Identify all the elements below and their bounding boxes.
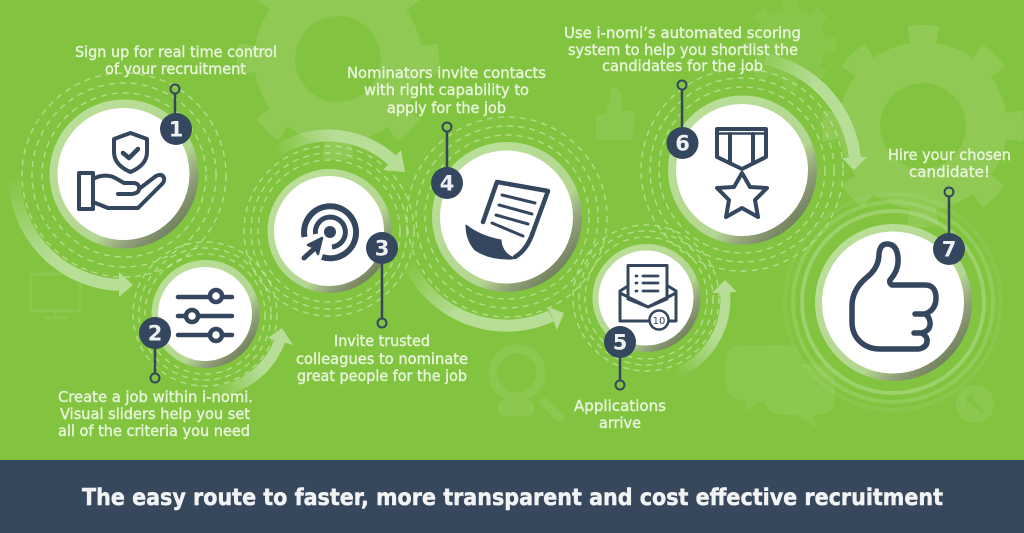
- icon: envelope with letter and count: [620, 266, 676, 330]
- step 5: [574, 244, 700, 432]
- text 4: Nominators invite contacts: [347, 64, 546, 82]
- badge 3: [366, 232, 398, 264]
- arrow: step 2 to 3: [212, 328, 293, 392]
- step 4: [347, 64, 582, 292]
- footer headline: The easy route to faster, more transparent and cost effective recruitment: [82, 485, 943, 511]
- connector 1: [170, 84, 180, 130]
- badge 1: 1: [169, 118, 183, 142]
- badge 2: [139, 317, 171, 349]
- connector 6: [678, 80, 686, 135]
- arrow: step 5 to 6: [677, 280, 737, 373]
- icon: count label: 10: [653, 316, 665, 327]
- badge 7: 7: [942, 238, 956, 262]
- text 3: [296, 332, 468, 385]
- step 6: [564, 24, 817, 244]
- text 3: colleagues to nominate: [296, 350, 468, 368]
- connector 7: [944, 188, 954, 240]
- text 6: candidates for the job: [602, 57, 763, 75]
- step 1: [50, 43, 277, 248]
- text 4: with right capability to: [364, 81, 529, 99]
- text 2: Create a job within i-nomi.: [58, 388, 253, 406]
- watermark: large gear top centre: [248, 0, 428, 149]
- icon: medal with star: [717, 129, 767, 217]
- badge 4: 4: [440, 172, 454, 196]
- icon: target with arrow: [304, 206, 356, 258]
- step 6 circle: [668, 96, 817, 244]
- text 5: arrive: [599, 414, 641, 432]
- text 2: all of the criteria you need: [58, 422, 250, 440]
- text 2: [58, 388, 253, 440]
- text 5: Applications: [574, 397, 666, 415]
- connector 4: [442, 122, 452, 175]
- text 3: great people for the job: [297, 367, 467, 385]
- step 1 circle: [50, 100, 198, 248]
- connector 2: [150, 340, 160, 382]
- badge 2: 2: [148, 322, 162, 346]
- text 5: [574, 397, 666, 432]
- text 4: [347, 64, 546, 117]
- dashed orbit rings: [22, 69, 843, 386]
- footer banner: [0, 460, 1024, 533]
- step 7: [815, 146, 1011, 381]
- badge 6: 6: [675, 132, 690, 156]
- icon: hand holding shield: [79, 133, 164, 209]
- text 6: [564, 24, 801, 75]
- icon: sliders: [178, 290, 232, 341]
- text 1: of your recruitment: [105, 60, 246, 78]
- badge 1: [160, 113, 192, 145]
- watermark: gear top right: [833, 36, 1013, 216]
- watermark: monitor: [31, 274, 80, 318]
- text 7: [888, 146, 1011, 181]
- watermark: cursor badge: [956, 385, 994, 423]
- badge 3: 3: [375, 236, 389, 260]
- step 2: [58, 260, 260, 440]
- badge 6: [666, 127, 698, 159]
- text 2: Visual sliders help you set: [60, 405, 250, 423]
- watermark: chat bubbles: [725, 345, 835, 428]
- text 1: [75, 43, 277, 78]
- arrow: step 4 to 5: [408, 262, 564, 330]
- background watermark icons: [31, 0, 1013, 428]
- watermark: magnifier person: [493, 349, 560, 418]
- arrow: step 1 to 2: [14, 172, 133, 297]
- connector 3: [378, 255, 386, 328]
- text 4: apply for the job: [387, 99, 506, 117]
- solid rings around step 7: [785, 194, 1001, 410]
- step 4 circle: [432, 142, 582, 292]
- badge 5: [604, 326, 636, 358]
- icon: document scroll: [466, 182, 548, 259]
- watermark: small gear behind step 6: [750, 5, 830, 85]
- text 3: Invite trusted: [334, 332, 430, 350]
- badge 5: 5: [613, 330, 627, 354]
- step 2 circle: [152, 260, 260, 368]
- step 7 circle: [815, 224, 972, 381]
- watermark: thumb: [596, 88, 636, 140]
- text 1: Sign up for real time control: [75, 43, 277, 61]
- arrow: step 6 to 7: [765, 59, 867, 170]
- icon: thumbs up: [852, 244, 936, 349]
- step 5 circle: [592, 244, 700, 352]
- text 6: Use i-nomi’s automated scoring: [564, 24, 801, 42]
- arrow: step 3 to 4: [278, 136, 405, 172]
- step 3 circle: [268, 169, 392, 293]
- text 6: system to help you shortlist the: [568, 41, 798, 59]
- step 3: [268, 169, 468, 385]
- badge 7: [933, 233, 965, 265]
- badge 4: [431, 167, 463, 199]
- connector 5: [616, 350, 624, 390]
- text 7: Hire your chosen: [888, 146, 1011, 164]
- text 7: candidate!: [909, 163, 990, 181]
